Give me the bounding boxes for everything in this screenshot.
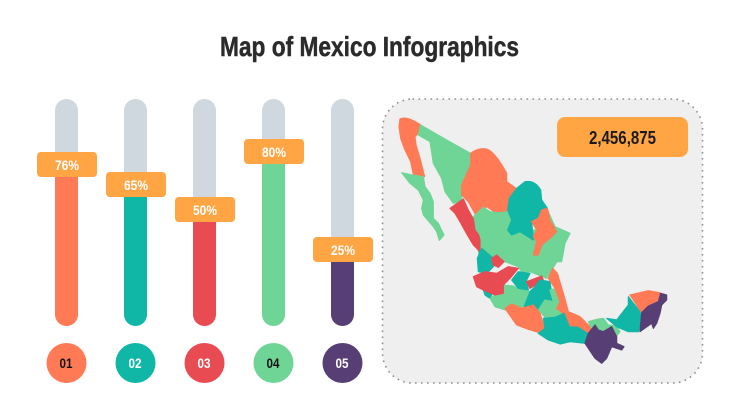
chart: bar 01 xyxy=(37,99,97,326)
badge 05: 05 xyxy=(336,355,349,371)
badge 03: 03 xyxy=(198,355,211,371)
badge 04: 04 xyxy=(266,355,280,371)
badge 01 xyxy=(46,343,86,383)
chart: bar 04: 80% xyxy=(262,144,286,160)
badge 02: 02 xyxy=(128,355,142,371)
chart: bar 05: 25% xyxy=(331,242,355,258)
chart: bar 01: 76% xyxy=(55,157,79,173)
badge 04 xyxy=(254,343,294,383)
panel: map background xyxy=(382,99,702,383)
callout: total value xyxy=(557,117,688,157)
callout: total value: 2,456,875 xyxy=(589,128,656,148)
map of Mexico xyxy=(399,118,667,363)
chart: bar 03 xyxy=(175,99,235,326)
badge 05 xyxy=(322,343,362,383)
title: Map of Mexico Infographics xyxy=(220,31,519,62)
chart: bar 02 xyxy=(106,99,166,326)
badge 01: 01 xyxy=(60,355,73,371)
chart: bar 05 xyxy=(313,99,373,326)
chart: bar 04 xyxy=(244,99,304,326)
badge 03 xyxy=(184,343,224,383)
chart: bar 03: 50% xyxy=(193,202,217,218)
badge 02 xyxy=(116,343,156,383)
chart: bar 02: 65% xyxy=(124,177,148,193)
